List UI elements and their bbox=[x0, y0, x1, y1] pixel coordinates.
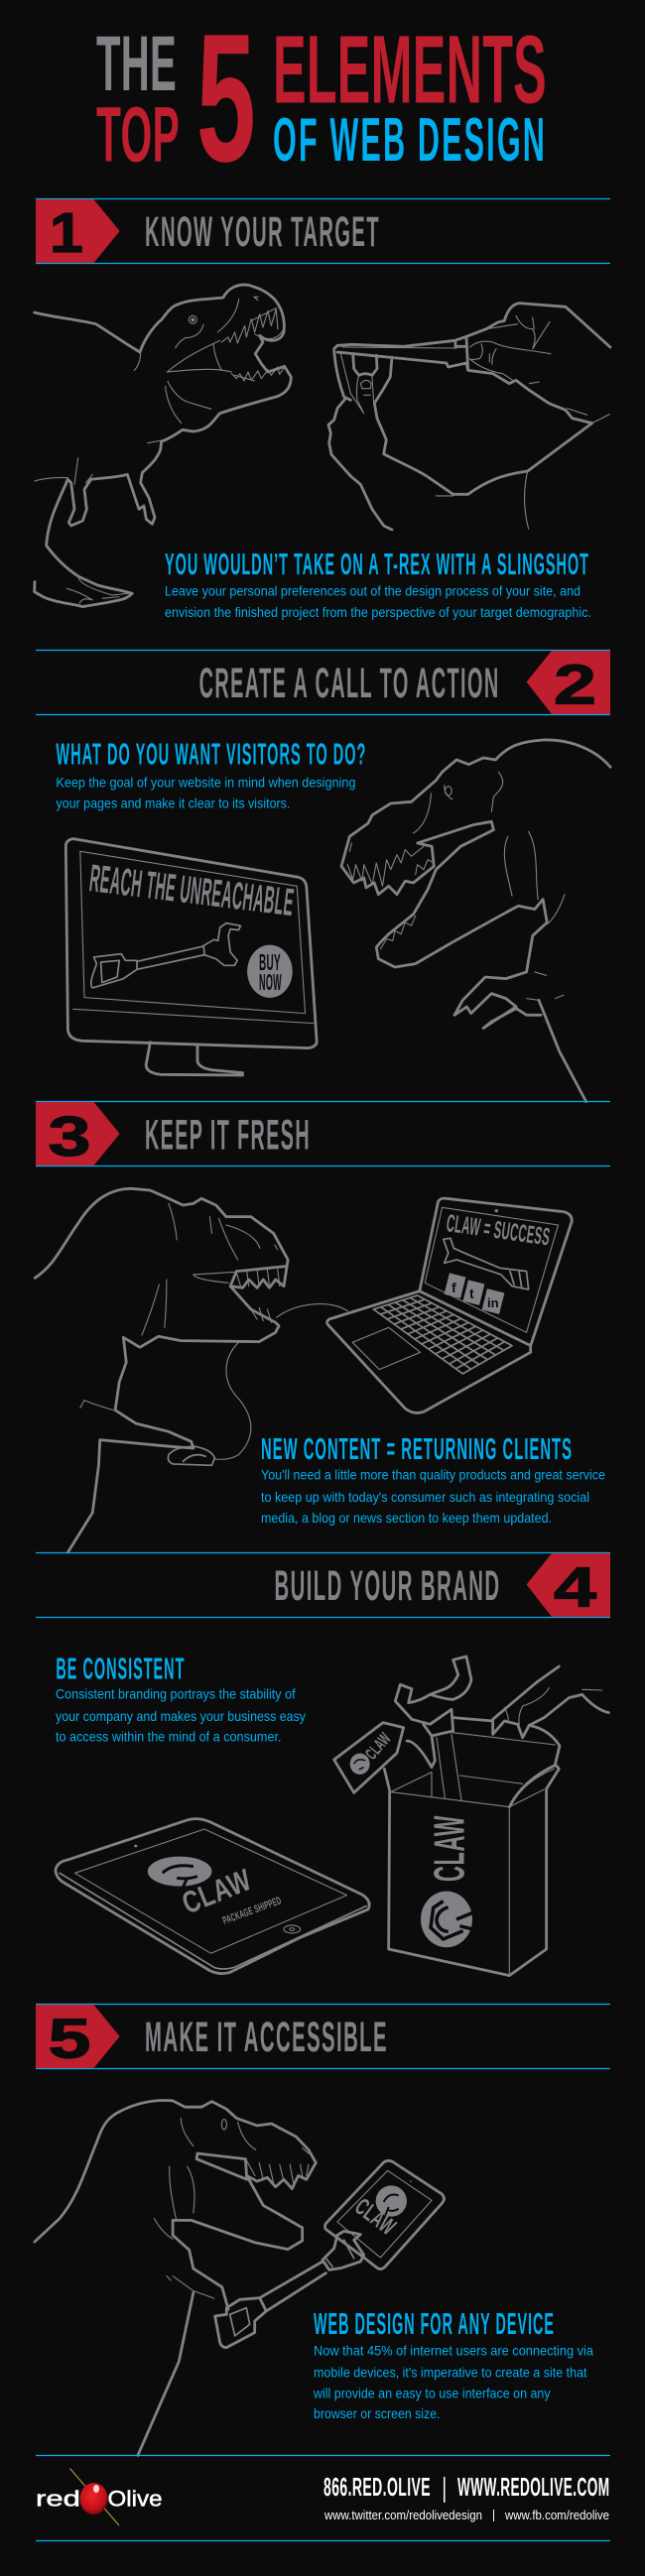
title bbox=[96, 0, 547, 199]
section 1 header: KNOW YOUR TARGET bbox=[145, 208, 380, 256]
section 5 header: 5 bbox=[48, 2008, 91, 2071]
text: section 5: Now that 45% of internet users are connecting via bbox=[314, 2342, 593, 2358]
logo: red olive: Olive bbox=[107, 2486, 163, 2512]
social icons: t bbox=[469, 1286, 474, 1301]
title: THE bbox=[96, 19, 177, 107]
text: section 5 bbox=[313, 2306, 593, 2421]
text: section 1 bbox=[165, 547, 591, 620]
illustration: hands with slingshot bbox=[328, 304, 610, 530]
social icons bbox=[445, 1273, 504, 1314]
text: section 1: Leave your personal preferences out of the design process of your site, and bbox=[165, 583, 580, 599]
eye bbox=[189, 315, 196, 323]
illustration: desktop monitor bbox=[65, 839, 317, 1075]
text: section 5: will provide an easy to use interface on any bbox=[313, 2385, 551, 2400]
text: section 4: to access within the mind of a consumer. bbox=[56, 1729, 282, 1745]
social icons: f bbox=[452, 1280, 456, 1295]
infographic canvas: REACH THE UNREACHABLE bbox=[87, 857, 297, 924]
illustration: box with claw and hand: CLAW bbox=[425, 1815, 474, 1882]
text: section 1: envision the finished project from the perspective of your target demographic. bbox=[165, 604, 591, 620]
lower teeth bbox=[231, 366, 285, 381]
footer bbox=[36, 2456, 610, 2541]
tablet caption: PACKAGE SHIPPED bbox=[221, 1895, 283, 1927]
contact: www.twitter.com/redolivedesign bbox=[323, 2509, 482, 2522]
text: section 3: You'll need a little more than quality products and great service bbox=[261, 1467, 605, 1483]
section 2 header bbox=[36, 651, 610, 716]
section 3 header: 3 bbox=[48, 1105, 91, 1168]
contact: 866.RED.OLIVE bbox=[323, 2472, 431, 2502]
social icons: in bbox=[487, 1295, 499, 1310]
text: section 4: BE CONSISTENT bbox=[56, 1651, 185, 1685]
text: section 3: media, a blog or news section to keep them updated. bbox=[261, 1510, 552, 1526]
contact: www.fb.com/redolive bbox=[504, 2509, 609, 2522]
teeth bbox=[347, 846, 434, 949]
section 5 header: MAKE IT ACCESSIBLE bbox=[145, 2014, 388, 2061]
text: section 2: Keep the goal of your website in mind when designing bbox=[56, 774, 355, 790]
logo bbox=[376, 2185, 407, 2217]
section 2 header: 2 bbox=[554, 653, 596, 716]
illustration: desktop monitor: BUY bbox=[259, 949, 281, 975]
hand bbox=[493, 1666, 608, 1738]
text: section 3: to keep up with today's consumer such as integrating social bbox=[261, 1489, 589, 1505]
hang tag bbox=[334, 1723, 404, 1792]
box logo bbox=[421, 1892, 472, 1947]
section 1 header bbox=[36, 198, 610, 265]
logo: red olive: red bbox=[36, 2486, 80, 2512]
illustration: t-rex with mouse bbox=[35, 1188, 347, 1552]
logo bbox=[148, 1857, 211, 1887]
illustration: t-rex section 2 bbox=[341, 740, 610, 1102]
tablet word: CLAW bbox=[349, 2193, 401, 2241]
text: section 2 bbox=[56, 737, 366, 811]
computer mouse bbox=[168, 1446, 214, 1465]
keyboard bbox=[373, 1295, 512, 1374]
claw tool on laptop bbox=[444, 1238, 529, 1289]
text: section 4 bbox=[56, 1651, 306, 1745]
text: section 5: browser or screen size. bbox=[314, 2405, 441, 2421]
section 4 header: 4 bbox=[554, 1555, 596, 1619]
text: section 5: mobile devices, it's imperative to create a site that bbox=[314, 2364, 587, 2380]
text: section 4: Consistent branding portrays the stability of bbox=[56, 1686, 296, 1702]
claw tool bbox=[215, 2231, 364, 2348]
illustration: tablet bbox=[56, 1819, 369, 1974]
buy now badge bbox=[247, 945, 293, 998]
upper teeth bbox=[221, 308, 283, 343]
claw head bbox=[395, 1656, 471, 1768]
contact bbox=[323, 2472, 609, 2522]
illustration: laptop bbox=[327, 1198, 572, 1412]
illustration: t-rex facing right bbox=[35, 285, 291, 607]
tag word: CLAW bbox=[362, 1729, 395, 1764]
title: TOP bbox=[96, 89, 180, 179]
section 1 header: 1 bbox=[50, 201, 83, 265]
section 3 header: KEEP IT FRESH bbox=[145, 1111, 311, 1159]
illustration: box with claw and hand bbox=[334, 1656, 608, 1976]
text: section 3 bbox=[261, 1431, 605, 1526]
section 5 header bbox=[36, 2004, 610, 2071]
illustration: desktop monitor: NOW bbox=[259, 969, 282, 995]
claw tool on screen bbox=[91, 923, 240, 988]
illustration: tablet on claw tool bbox=[215, 2160, 444, 2348]
tablet logo word: CLAW bbox=[178, 1862, 256, 1920]
text: section 4: your company and makes your business easy bbox=[56, 1708, 306, 1724]
text: section 2: your pages and make it clear to its visitors. bbox=[56, 796, 290, 811]
title: 5 bbox=[196, 0, 256, 199]
section 3 header bbox=[36, 1101, 610, 1168]
illustration: t-rex holding tablet with claw bbox=[35, 2101, 316, 2455]
logo: red olive bbox=[36, 2468, 163, 2525]
section 4 header bbox=[36, 1553, 610, 1619]
